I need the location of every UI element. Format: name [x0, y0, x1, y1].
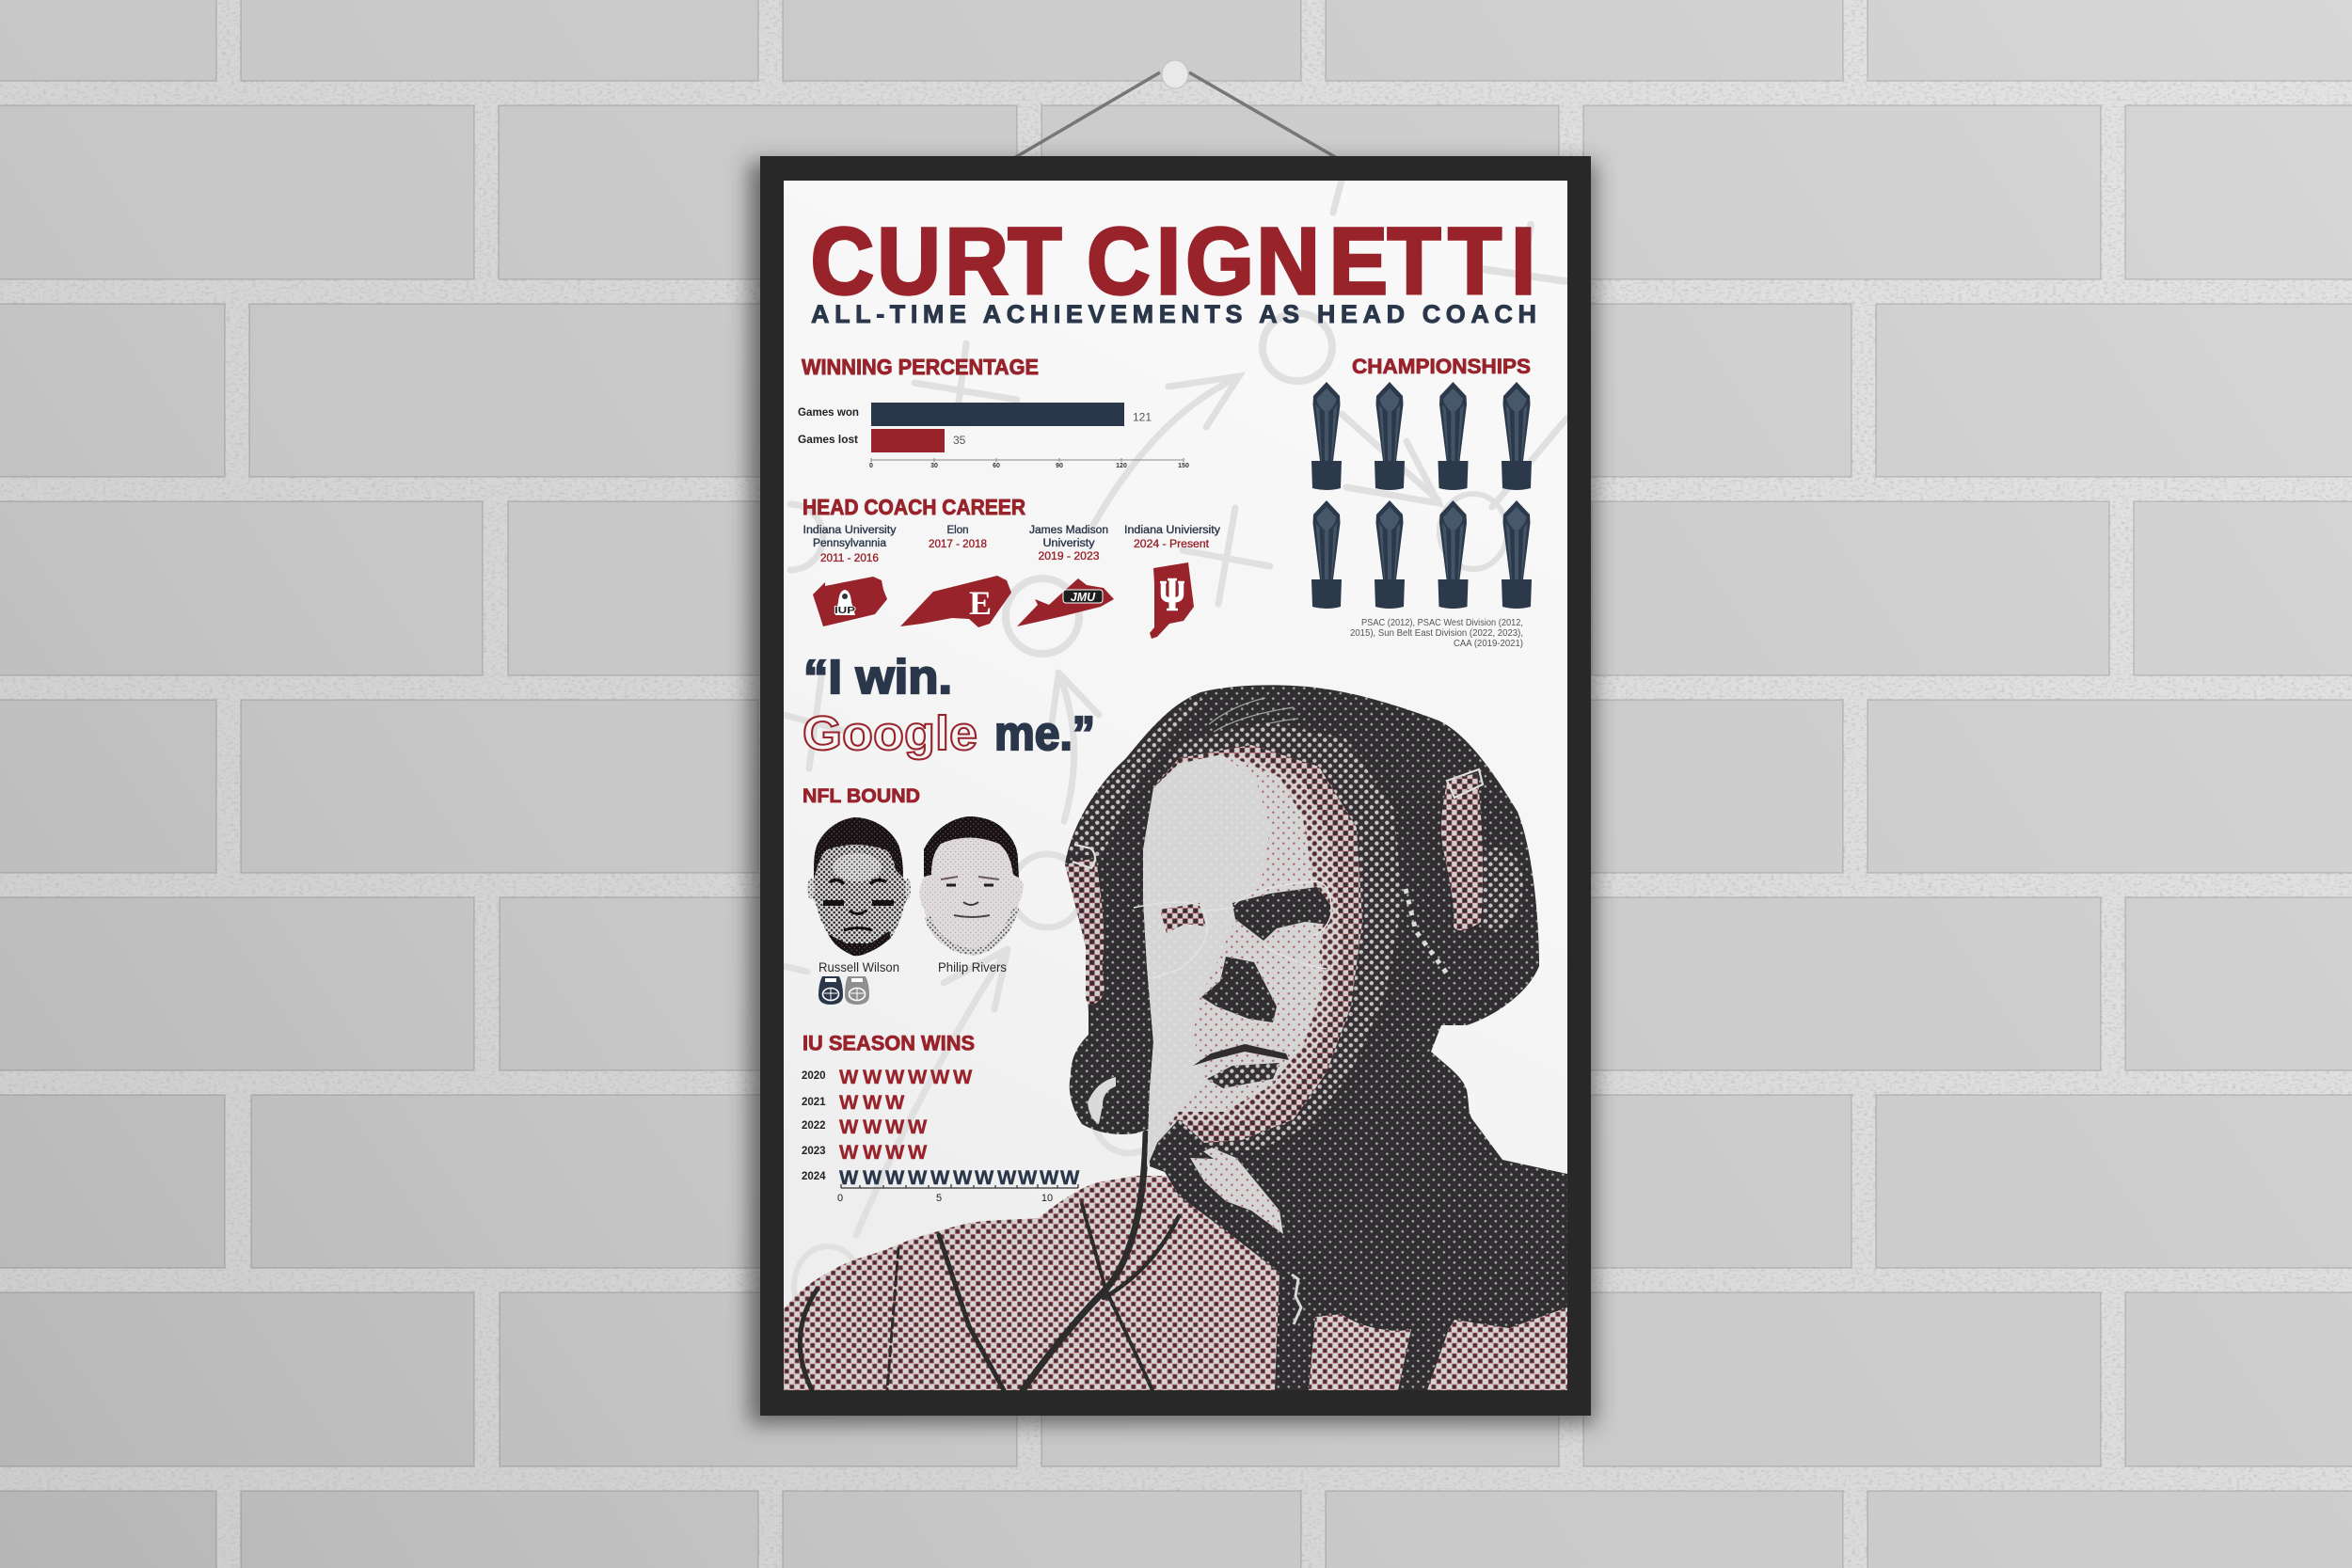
icon: Pennsylvania with IUP logo: IUP — [834, 605, 855, 616]
frame shadow — [749, 162, 1596, 1424]
career labels: Univeristy — [1042, 538, 1095, 549]
year labels: 2024 — [802, 1171, 826, 1182]
icon: Indiana with IU trident — [1150, 562, 1194, 639]
career labels: Indiana Univiersity — [1124, 525, 1220, 536]
panel: IU season wins — [802, 1031, 1080, 1204]
panel: NFL bound — [803, 785, 1024, 1005]
career years: 2019 - 2023 — [1039, 551, 1099, 562]
face mid tone — [1143, 752, 1342, 1167]
player names: Philip Rivers — [938, 960, 1007, 974]
icon: North Carolina with Elon E — [900, 576, 1011, 627]
right eye shadow — [1232, 887, 1331, 941]
poster paper — [784, 181, 1567, 1390]
quote line two: me.” — [994, 706, 1095, 760]
win rows: WWWW — [839, 1116, 928, 1138]
bar chart: 150 — [1178, 463, 1189, 469]
axis labels: 5 — [936, 1193, 942, 1204]
career labels — [803, 525, 1220, 549]
axis labels: 0 — [837, 1193, 843, 1204]
championships caption — [1350, 618, 1523, 649]
win rows — [839, 1066, 1080, 1189]
shirt seams and headset cords — [800, 1133, 1179, 1390]
player names — [818, 960, 1007, 974]
icon: Virginia with JMU logo — [1017, 578, 1114, 626]
axis labels — [837, 1193, 1053, 1204]
championships caption: CAA (2019-2021) — [1454, 639, 1523, 649]
year labels: 2023 — [802, 1146, 826, 1157]
panel: championships — [1311, 355, 1532, 649]
jaw shadow — [1174, 1119, 1214, 1163]
win rows: WWWWWWWWWWW — [839, 1166, 1080, 1189]
lower lip — [1207, 1063, 1279, 1088]
icon: North Carolina with Elon E: E — [969, 584, 992, 622]
icon: Virginia with JMU logo: JMU — [1071, 591, 1096, 604]
quote outlined word: Google — [803, 706, 977, 760]
year labels — [802, 1070, 826, 1182]
headset clips — [1073, 769, 1483, 974]
championships caption: 2015), Sun Belt East Division (2022, 2023), — [1350, 628, 1523, 639]
bar chart — [798, 403, 1189, 469]
left eye shadow — [1160, 903, 1206, 933]
face mid dark tone — [1143, 745, 1362, 1167]
portrait: Russell Wilson — [807, 817, 911, 956]
right headset band — [1441, 773, 1483, 930]
right ear cup tone — [1483, 847, 1523, 931]
bar chart: 0 — [869, 463, 873, 469]
career years: 2011 - 2016 — [820, 553, 879, 564]
career labels: Pennsylvannia — [813, 538, 887, 549]
icon: Super Bowl ring navy — [818, 976, 843, 1005]
heading: WINNING PERCENTAGE — [802, 355, 1039, 379]
bar chart: 60 — [993, 463, 1000, 469]
right cheek highlight — [1318, 930, 1322, 952]
poster frame — [760, 156, 1591, 1416]
win rows: WWWW — [839, 1141, 928, 1164]
portrait: Philip Rivers — [919, 816, 1024, 953]
win rows: WWW — [839, 1091, 905, 1114]
title: CURT CIGNETTI — [811, 210, 1535, 314]
year labels: 2021 — [802, 1097, 826, 1108]
career years: 2024 - Present — [1134, 539, 1210, 550]
subtitle: ALL-TIME ACHIEVEMENTS AS HEAD COACH — [811, 300, 1536, 328]
axis labels: 10 — [1041, 1193, 1053, 1204]
player names: Russell Wilson — [818, 960, 899, 974]
face highlight — [1143, 754, 1270, 1167]
bar chart: 121 — [1133, 410, 1152, 423]
panel: head coach career — [803, 495, 1220, 639]
face tone outer halo — [1143, 722, 1402, 1167]
bar chart: 30 — [930, 463, 938, 469]
career years: 2017 - 2018 — [929, 539, 987, 550]
heading: IU SEASON WINS — [803, 1031, 975, 1055]
hair streaks — [1208, 697, 1298, 732]
career labels: Indiana University — [803, 525, 897, 536]
career years — [820, 539, 1210, 564]
win rows: WWWWWW — [839, 1066, 973, 1088]
nail — [1162, 60, 1188, 88]
bar chart: 35 — [953, 434, 966, 447]
icon: Super Bowl ring grey — [845, 976, 869, 1005]
shirt — [784, 1176, 1567, 1390]
bar chart: Games won — [798, 407, 859, 419]
career labels: James Madison — [1029, 525, 1108, 536]
hanging wire — [1014, 72, 1337, 158]
glasses — [1134, 881, 1331, 978]
heading: CHAMPIONSHIPS — [1352, 355, 1531, 378]
heading: NFL BOUND — [803, 785, 920, 807]
bar chart: Games lost — [798, 435, 858, 446]
year labels: 2020 — [802, 1070, 826, 1082]
quote — [803, 650, 1095, 760]
collar highlight — [1190, 1148, 1283, 1234]
quote line one: “I win. — [803, 650, 952, 704]
wins axis — [841, 1184, 1078, 1188]
bar chart: 90 — [1056, 463, 1063, 469]
halftone portrait of Curt Cignetti — [784, 685, 1567, 1390]
bar chart: 120 — [1116, 463, 1127, 469]
hair, headset and jacket silhouette — [1065, 685, 1567, 1390]
left hair highlight band — [1069, 698, 1204, 858]
earpiece foam highlight — [1088, 1077, 1116, 1124]
championships caption: PSAC (2012), PSAC West Division (2012, — [1361, 618, 1523, 628]
panel: winning percentage — [798, 355, 1189, 469]
face light tone — [1143, 757, 1323, 1167]
nose shadow — [1201, 957, 1277, 1022]
upper lip line — [1193, 1044, 1289, 1066]
heading: HEAD COACH CAREER — [803, 495, 1025, 519]
icon: Pennsylvania with IUP logo — [813, 577, 887, 626]
playbook marks background — [784, 181, 1567, 1325]
icons: eight trophies — [1311, 382, 1532, 609]
left headset band — [1065, 858, 1104, 1005]
year labels: 2022 — [802, 1120, 826, 1132]
career labels: Elon — [946, 525, 969, 536]
zipper — [1292, 1275, 1301, 1324]
